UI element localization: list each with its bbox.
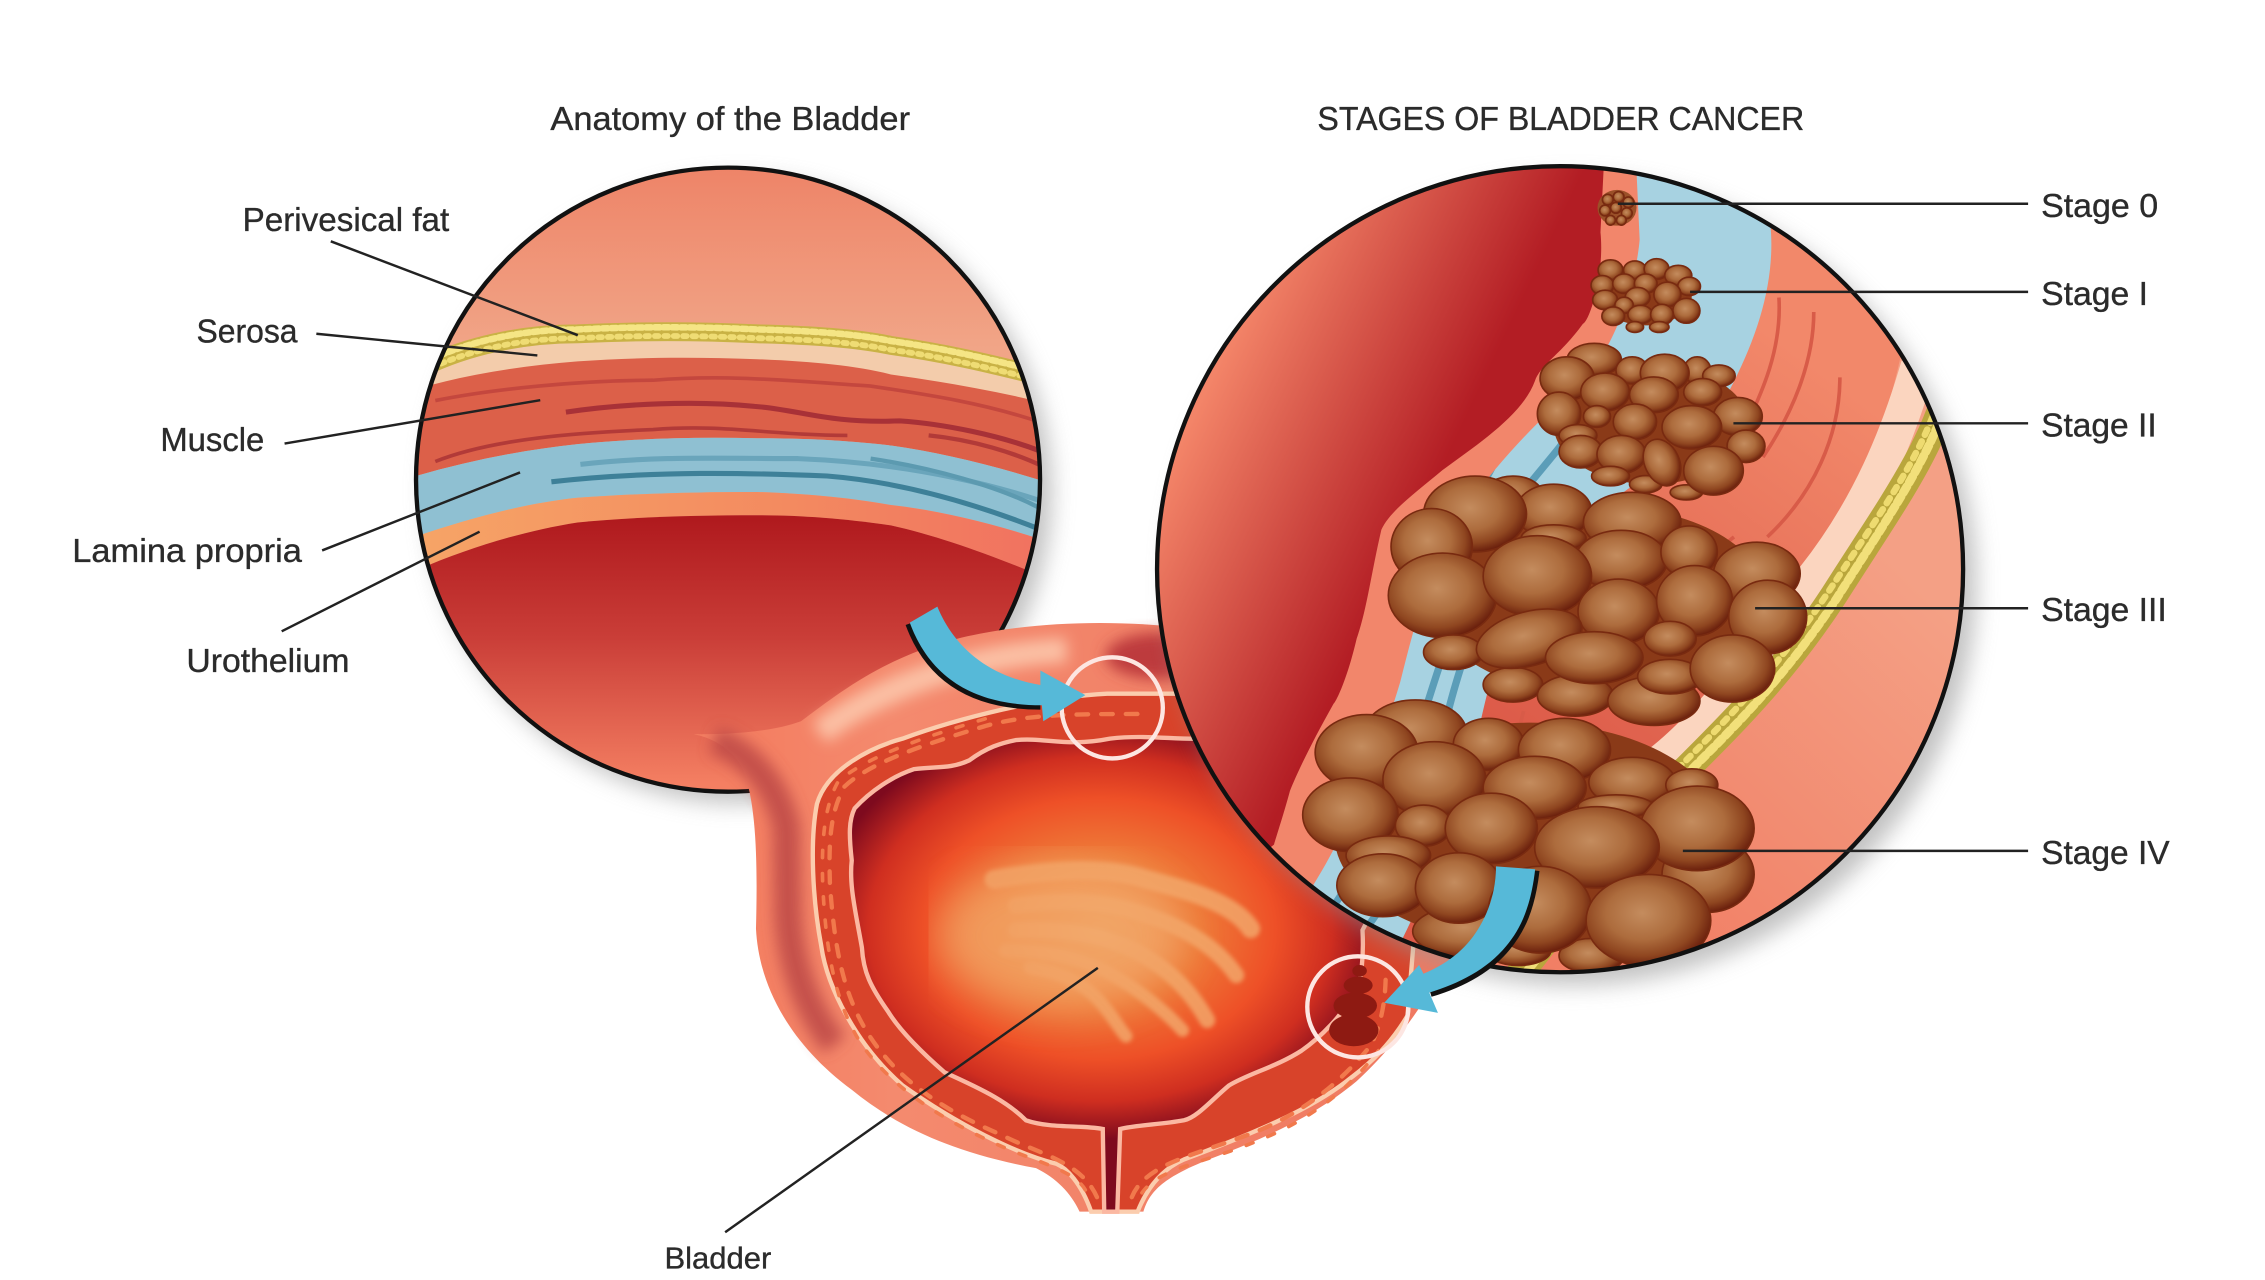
label: Urothelium: Urothelium — [186, 643, 350, 680]
label: Bladder: Bladder — [664, 1242, 771, 1275]
label: Serosa: Serosa — [196, 313, 298, 350]
bladder mucosal folds — [936, 863, 1251, 1036]
magnifier ring: tumour — [1307, 956, 1408, 1057]
tumour: stage 0 — [1598, 190, 1637, 226]
label: Stage 0: Stage 0 — [2041, 188, 2158, 225]
bladder top-right shading — [1106, 633, 1216, 679]
tumour clusters — [1303, 190, 1807, 973]
bladder lumen — [850, 737, 1393, 1212]
bladder outer body — [694, 610, 1466, 1212]
layer: perivesical fat band — [432, 327, 1033, 379]
label: Serosa — [196, 313, 537, 355]
label: Stage I: Stage I — [2041, 276, 2148, 313]
label: Lamina propria: Lamina propria — [72, 533, 302, 570]
layer: muscle — [1403, 228, 1900, 944]
title: stages of bladder cancer: STAGES OF BLADDER CANCER — [1317, 101, 1804, 138]
bladder neck shadow — [714, 740, 834, 1045]
layer: lamina propria band — [418, 438, 1038, 537]
bladder wall muscle fibres — [822, 714, 1386, 1197]
layer: perivesical fat — [1508, 408, 1941, 970]
tumour: stage II — [1537, 343, 1765, 500]
label: Perivesical fat — [243, 202, 578, 335]
layer: lamina propria — [1313, 176, 1772, 938]
label: Muscle — [160, 400, 540, 459]
tumour: stage IV — [1303, 700, 1754, 973]
panel: stages magnifier circle — [1132, 145, 2017, 1016]
bladder wall — [813, 694, 1451, 1212]
bladder top highlight — [820, 650, 1066, 733]
tumour in bladder wall — [1329, 965, 1378, 1046]
label: Muscle: Muscle — [160, 422, 264, 459]
layer: urothelium band — [423, 492, 1032, 569]
label: Bladder — [664, 968, 1098, 1275]
label: Stage IV: Stage IV — [2041, 835, 2171, 872]
label: Perivesical fat: Perivesical fat — [243, 202, 449, 239]
layer: cream serosa — [1651, 366, 1918, 769]
label: Lamina propria — [72, 472, 520, 570]
muscle fibres — [1728, 298, 1842, 542]
label: Stage II: Stage II — [2041, 407, 2157, 444]
arrow: tumour circle to bladder wall — [1384, 866, 1537, 1013]
title: anatomy of the bladder: Anatomy of the Bladder — [550, 101, 910, 138]
layer: bladder lumen — [430, 515, 1025, 790]
label: Stage III: Stage III — [2041, 592, 2167, 629]
layer: urothelium — [1271, 170, 1640, 885]
magnifier ring: wall section — [1062, 657, 1163, 758]
layer: serosa cream band — [433, 341, 1027, 399]
layer: lumen — [1159, 168, 1604, 847]
label: Urothelium — [186, 532, 480, 680]
panel: bladder cross-section — [694, 610, 1466, 1212]
panel: anatomy magnifier circle — [392, 145, 1074, 827]
arrow: anatomy circle to bladder wall — [908, 607, 1085, 721]
tumour: stage III — [1388, 476, 1807, 725]
layer: muscle band — [406, 358, 1059, 486]
tumour: stage I — [1591, 259, 1700, 332]
